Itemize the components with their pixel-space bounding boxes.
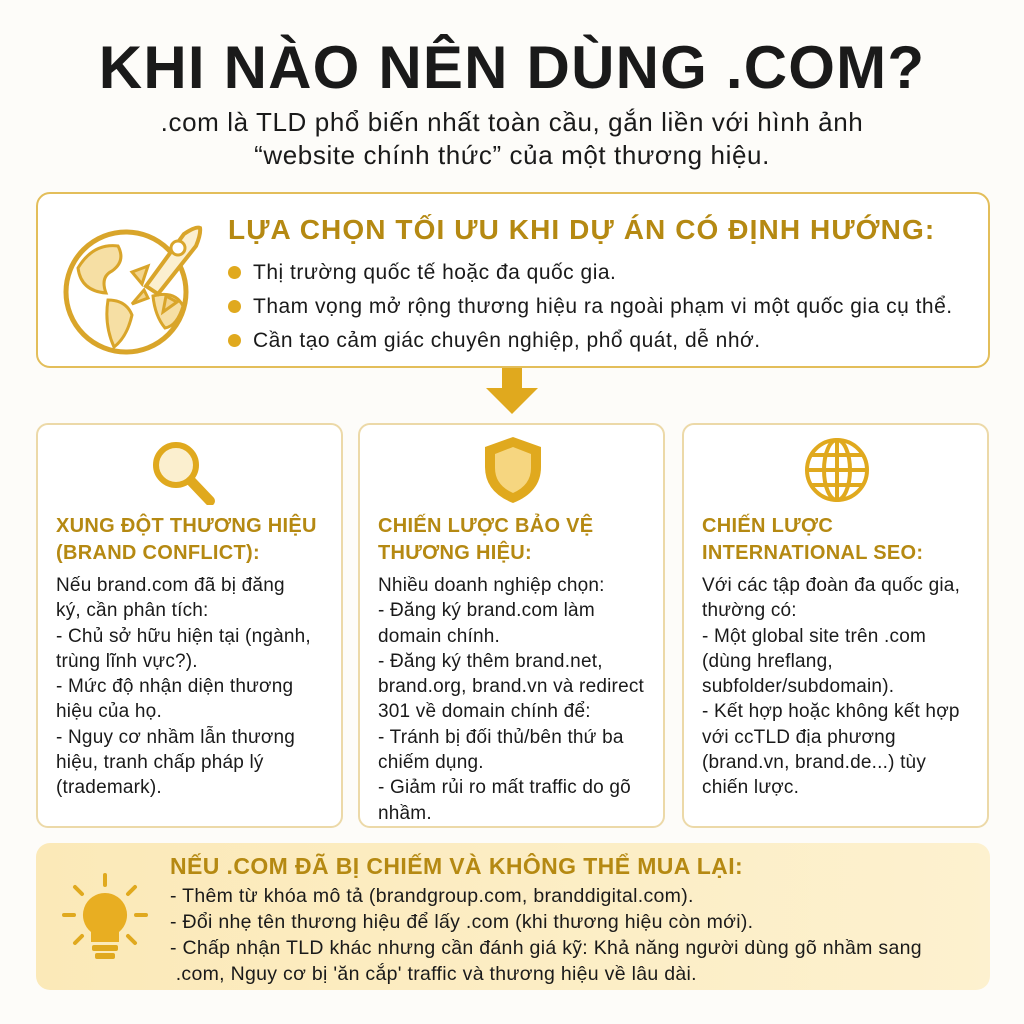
heading: CHIẾN LƯỢC BẢO VỆ <box>378 515 593 537</box>
panel heading: LỰA CHỌN TỐI ƯU KHI DỰ ÁN CÓ ĐỊNH HƯỚNG: <box>228 214 935 245</box>
bullet list: Tham vọng mở rộng thương hiệu ra ngoài phạm vi một quốc gia cụ thể. <box>253 295 953 318</box>
arrow: down <box>486 368 538 414</box>
heading: (BRAND CONFLICT): <box>56 542 260 564</box>
heading: CHIẾN LƯỢC <box>702 515 833 537</box>
body text: - Thêm từ khóa mô tả (brandgroup.com, branddigital.com). <box>170 885 694 907</box>
heading <box>378 514 593 564</box>
icon: shield <box>485 437 541 503</box>
body text: .com, Nguy cơ bị 'ăn cắp' traffic và thương hiệu về lâu dài. <box>176 963 697 985</box>
body text: - Nguy cơ nhầm lẫn thương hiệu, tranh chấp pháp lý (trademark). <box>56 727 295 798</box>
body text: - Đăng ký brand.com làm <box>378 600 595 621</box>
body text: - Tránh bị đối thủ/bên thứ ba chiếm dụng. <box>378 727 624 773</box>
body text <box>378 575 644 824</box>
panel: brand protection <box>358 423 665 828</box>
heading <box>702 514 923 564</box>
panel: if .com taken <box>36 843 990 990</box>
heading <box>56 514 317 564</box>
icon: light bulb <box>62 873 148 959</box>
heading: NẾU .COM ĐÃ BỊ CHIẾM VÀ KHÔNG THỂ MUA LẠI: <box>170 853 743 879</box>
heading: THƯƠNG HIỆU: <box>378 542 532 564</box>
body text: - Kết hợp hoặc không kết hợp với ccTLD địa phương (brand.vn, brand.de...) tùy chiến lược. <box>702 701 960 798</box>
body text: - Chủ sở hữu hiện tại (ngành, trùng lĩnh vực?). <box>56 626 311 672</box>
body text <box>702 575 960 798</box>
icon: magnifier <box>153 442 215 505</box>
body text: - Đổi nhẹ tên thương hiệu để lấy .com (khi thương hiệu còn mới). <box>170 911 753 933</box>
heading: XUNG ĐỘT THƯƠNG HIỆU <box>56 515 317 537</box>
heading: INTERNATIONAL SEO: <box>702 542 923 564</box>
subtitle: “website chính thức” của một thương hiệu. <box>254 140 770 170</box>
bullet list: Thị trường quốc tế hoặc đa quốc gia. <box>253 261 616 284</box>
panel: brand conflict <box>36 423 343 828</box>
body text <box>170 885 922 985</box>
title: KHI NÀO NÊN DÙNG .COM? <box>99 34 925 101</box>
subtitle <box>161 107 863 170</box>
body text: - Đăng ký thêm brand.net, brand.org, brand.vn và redirect 301 về domain chính để: <box>378 651 644 722</box>
body text: Nhiều doanh nghiệp chọn: <box>378 575 605 596</box>
panel: international SEO <box>682 423 989 828</box>
body text: - Chấp nhận TLD khác nhưng cần đánh giá kỹ: Khả năng người dùng gõ nhầm sang <box>170 937 922 959</box>
body text <box>56 575 311 798</box>
body text: ký, cần phân tích: <box>56 600 209 621</box>
icon: globe <box>805 438 869 502</box>
bullet list: Cần tạo cảm giác chuyên nghiệp, phổ quát, dễ nhớ. <box>253 329 761 352</box>
body text: Với các tập đoàn đa quốc gia, thường có: <box>702 575 960 621</box>
body text: - Một global site trên .com (dùng hreflang, subfolder/subdomain). <box>702 626 926 697</box>
panel: optimal choice <box>36 192 990 368</box>
subtitle: .com là TLD phổ biến nhất toàn cầu, gắn liền với hình ảnh <box>161 107 863 137</box>
body text: - Mức độ nhận diện thương hiệu của họ. <box>56 676 293 722</box>
body text: - Giảm rủi ro mất traffic do gõ nhầm. <box>378 777 631 824</box>
body text: Nếu brand.com đã bị đăng <box>56 575 285 596</box>
bullet list <box>228 261 953 352</box>
body text: domain chính. <box>378 626 500 647</box>
icon: globe with rocket <box>64 226 202 354</box>
